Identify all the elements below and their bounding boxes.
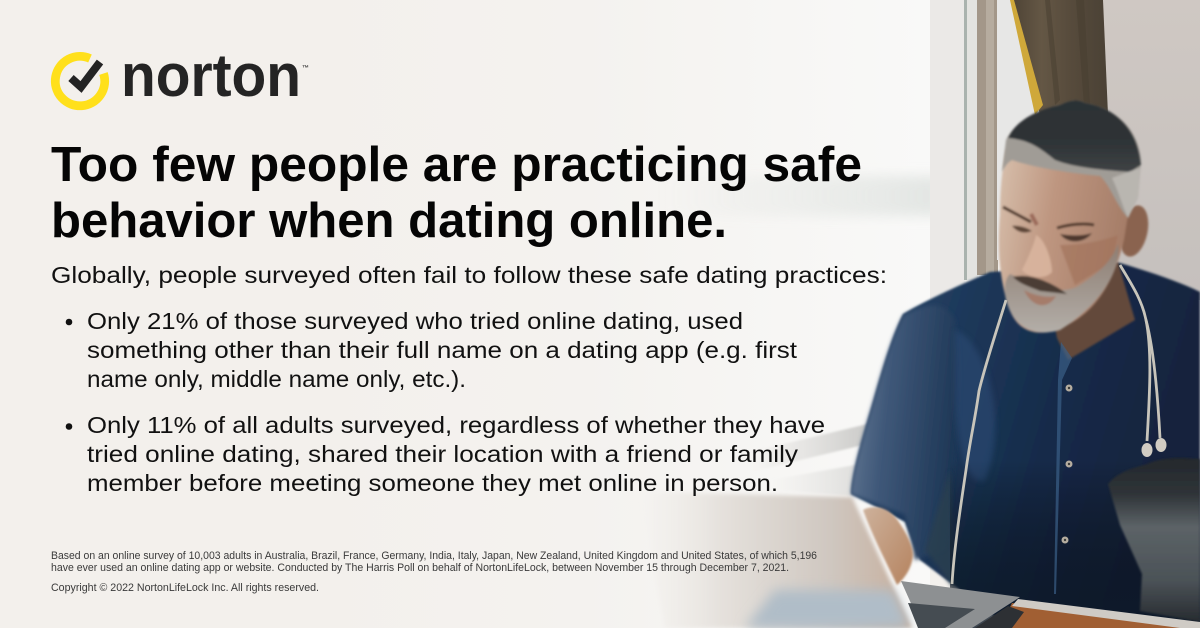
laptop base and keyboard xyxy=(901,581,1024,628)
survey footnote: Based on an online survey of 10,003 adults in Australia, Brazil, France, Germany, India, Italy, Japan, New Zealand, United Kingdom and United States, of which 5,196 xyxy=(51,550,817,562)
window sill xyxy=(750,421,880,497)
hand xyxy=(863,507,913,585)
shirt xyxy=(851,263,1200,628)
icon: yellow ring with check xyxy=(55,56,105,106)
hair xyxy=(1002,101,1141,218)
title: Too few people are practicing safe xyxy=(51,138,862,192)
earphone cords xyxy=(952,265,1160,584)
moustache and lip xyxy=(1013,276,1067,294)
table xyxy=(1000,599,1200,628)
ear xyxy=(1115,203,1153,259)
copyright: Copyright © 2022 NortonLifeLock Inc. All rights reserved. xyxy=(51,582,319,594)
eyes xyxy=(1012,226,1032,233)
beard xyxy=(1005,244,1118,332)
nose highlight xyxy=(1022,235,1052,277)
logo: norton xyxy=(55,42,309,109)
bullet: 21% full name xyxy=(66,308,798,392)
intro sentence: Globally, people surveyed often fail to follow these safe dating practices: xyxy=(51,262,887,288)
shirt placket and buttons xyxy=(1054,342,1072,594)
bullet: 11% shared location: Only 11% of all adults surveyed, regardless of whether they have xyxy=(87,412,825,438)
bullet: 21% full name: name only, middle name only, etc.). xyxy=(87,366,466,392)
wordmark: norton xyxy=(121,42,301,109)
bullet: 11% shared location xyxy=(66,412,825,496)
right cheek shade xyxy=(1060,235,1118,285)
jacket on chair xyxy=(1108,458,1200,622)
survey footnote: have ever used an online dating app or website. Conducted by The Harris Poll on behalf of NortonLifeLock, between November 15 through December 7, 2021. xyxy=(51,562,789,574)
man with earphones xyxy=(851,101,1200,628)
bullet: 21% full name: Only 21% of those surveyed who tried online dating, used xyxy=(87,308,743,334)
survey footnote xyxy=(51,550,817,574)
bullet: 11% shared location: tried online dating, shared their location with a friend or family xyxy=(87,441,799,467)
neck xyxy=(1050,262,1135,360)
laptop lid xyxy=(640,492,912,628)
bullet: 11% shared location: member before meeting someone they met online in person. xyxy=(87,470,778,496)
head and face xyxy=(999,148,1132,333)
brows xyxy=(1003,207,1094,228)
bullet: 21% full name: something other than their full name on a dating app (e.g. first xyxy=(87,337,798,363)
title xyxy=(51,138,862,248)
title: behavior when dating online. xyxy=(51,194,727,248)
sleeve xyxy=(851,305,959,560)
logo: norton: ™ xyxy=(302,65,309,72)
